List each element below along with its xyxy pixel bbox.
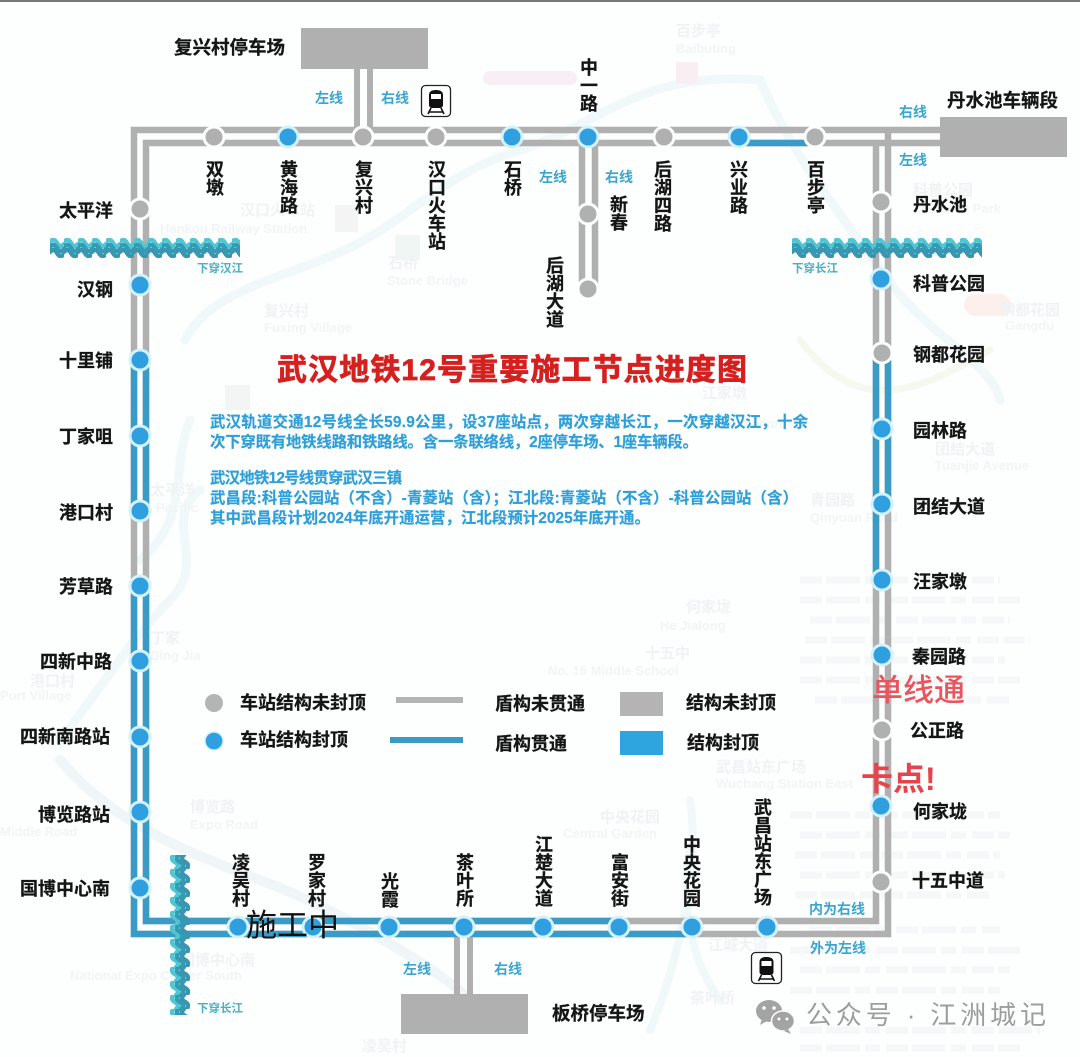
station: 新春: 新春 xyxy=(608,194,628,231)
track labels: left and right lines: 左线 xyxy=(315,90,343,106)
faded background city metro map: Middle Road xyxy=(0,824,77,839)
faded background city metro map: 国博中心南 xyxy=(180,951,255,969)
faded background city metro map: He Jialong xyxy=(660,618,726,633)
station: 科普公园 xyxy=(871,269,985,294)
faded background city metro map: Pacific xyxy=(156,500,198,515)
station: 四新南路站 xyxy=(20,726,150,747)
text block: line overview: 武汉轨道交通12号线全长59.9公里，设37座站点，两次穿越长江，一次穿越汉江，十余 xyxy=(210,412,809,431)
faded background notes xyxy=(790,580,1040,1048)
title: 武汉地铁12号重要施工节点进度图 xyxy=(277,354,747,387)
text block: line overview xyxy=(210,412,809,451)
station: 百步亭 xyxy=(805,127,825,214)
track labels: left and right lines: 右线 xyxy=(494,961,522,977)
station: 钢都花园: 钢都花园 xyxy=(913,345,985,365)
track labels: left and right lines: 左线 xyxy=(403,961,431,977)
bottom row stations xyxy=(228,798,777,937)
station: 汉钢 xyxy=(77,275,150,300)
station: 兴业路 xyxy=(728,127,749,214)
station: 四新南路站: 四新南路站 xyxy=(20,726,110,747)
station: 秦园路 xyxy=(872,645,966,667)
track labels: left and right lines: 内为右线 xyxy=(809,901,865,917)
station: 博览路站 xyxy=(38,802,150,825)
station: 双墩: 双墩 xyxy=(204,160,224,196)
faded background city metro map: Science Park xyxy=(920,201,1002,216)
station: 公正路 xyxy=(872,720,964,741)
depot: 丹水池车辆段 xyxy=(940,90,1067,157)
station: 江楚大道: 江楚大道 xyxy=(533,835,553,908)
top row stations xyxy=(204,58,825,329)
station: 后湖四路: 后湖四路 xyxy=(652,160,672,232)
faded background city metro map: 中央花园 xyxy=(600,808,660,826)
station: 茶叶所 xyxy=(454,853,474,937)
track labels: left and right lines: 左线 xyxy=(899,152,927,168)
station: 芳草路 xyxy=(59,576,150,597)
station: 凌吴村: 凌吴村 xyxy=(230,853,250,907)
station: 博览路站: 博览路站 xyxy=(38,805,110,825)
station: 中央花园: 中央花园 xyxy=(681,835,701,907)
station: 百步亭: 百步亭 xyxy=(805,160,825,214)
faded background city metro map: 江城大道 xyxy=(708,936,768,954)
callout: 施工中: 施工中 xyxy=(246,908,339,943)
watermark text: 公众号 · 江洲城记 xyxy=(806,1000,1046,1030)
faded background city metro map: Wuchang Station East xyxy=(716,776,854,791)
track labels: left and right lines xyxy=(315,90,927,977)
faded background city metro map: 江家墩 xyxy=(702,384,747,402)
station: 后湖大道 xyxy=(544,256,598,329)
station: 国博中心南 xyxy=(20,878,150,899)
station: 富安街 xyxy=(609,852,629,937)
station: 罗家村 xyxy=(303,853,326,937)
track labels: left and right lines: 左线 xyxy=(539,169,567,185)
faded background city metro map: 科普公园 xyxy=(913,181,973,199)
station: 凌吴村 xyxy=(228,853,250,937)
station: 丁家咀: 丁家咀 xyxy=(59,426,113,447)
river crossing: 下穿汉江: 下穿汉江 xyxy=(197,261,243,275)
station: 罗家村: 罗家村 xyxy=(306,853,326,907)
station: 黄海路: 黄海路 xyxy=(278,159,298,214)
depot: 板桥停车场: 板桥停车场 xyxy=(552,1003,645,1024)
legend: station roof sealed: 车站结构封顶 xyxy=(240,729,348,750)
faded background city metro map: 复兴村 xyxy=(264,302,309,320)
track labels: left and right lines: 右线 xyxy=(381,90,409,106)
top edge strip xyxy=(0,0,1080,2)
station: 中央花园 xyxy=(681,835,702,937)
station: 复兴村: 复兴村 xyxy=(353,160,373,214)
legend: tunnel not connected: 盾构未贯通 xyxy=(495,694,585,714)
depot: 复兴村停车场: 复兴村停车场 xyxy=(174,37,285,58)
track labels: left and right lines: 右线 xyxy=(605,169,633,185)
text block: opening schedule xyxy=(210,468,798,527)
depot: 丹水池车辆段: 丹水池车辆段 xyxy=(947,90,1058,111)
station: 钢都花园 xyxy=(872,343,985,365)
station: 太平洋: 太平洋 xyxy=(59,201,113,221)
station: 中一路: 中一路 xyxy=(578,58,598,112)
line 12 loop tracks xyxy=(134,130,940,934)
station: 复兴村 xyxy=(353,127,373,214)
faded background city metro map: Gangdu xyxy=(1005,318,1054,333)
faded background city metro map: Baibuting xyxy=(676,41,736,56)
station: 武昌站东广场: 武昌站东广场 xyxy=(752,798,772,906)
faded background city metro map: 百步亭 xyxy=(676,22,721,40)
legend: structure not sealed xyxy=(620,692,776,716)
faded background city metro map: 十五中 xyxy=(645,645,690,662)
faded background city metro map: No. 15 Middle School xyxy=(548,663,679,678)
station: 园林路 xyxy=(872,419,967,441)
station: 丹水池 xyxy=(871,192,967,215)
right column stations xyxy=(871,192,985,892)
station: 十五中道: 十五中道 xyxy=(912,870,984,891)
station: 汉口火车站: 汉口火车站 xyxy=(426,160,446,250)
river crossing: 下穿长江 (south) xyxy=(170,855,243,1015)
icon: train at 汉口火车站 xyxy=(422,86,450,116)
station: 石桥 xyxy=(502,127,522,196)
faded background city metro map: 博览路 xyxy=(190,798,235,816)
station: 富安街: 富安街 xyxy=(609,852,629,907)
station: 科普公园: 科普公园 xyxy=(913,274,985,294)
faded background city metro map: 丁家 xyxy=(150,629,180,647)
station: 团结大道 xyxy=(872,494,985,517)
station: 十里铺: 十里铺 xyxy=(59,351,113,371)
faded background city metro map: 港口村 xyxy=(30,672,75,690)
station: 丁家咀 xyxy=(59,426,150,447)
faded background city metro map: Wang Jiadun xyxy=(702,416,782,431)
station: 光霞: 光霞 xyxy=(379,872,399,908)
station: 武昌站东广场 xyxy=(752,798,777,937)
text block: opening schedule: 武汉地铁12号线贯穿武汉三镇 xyxy=(210,468,402,487)
station: 中一路 xyxy=(578,58,598,147)
station: 公正路: 公正路 xyxy=(910,721,964,741)
station: 后湖大道: 后湖大道 xyxy=(544,256,564,329)
station: 港口村: 港口村 xyxy=(59,503,113,523)
faded background city metro map: Port Village xyxy=(0,688,71,703)
faded background city metro map: 武昌站东广场 xyxy=(716,758,806,776)
station: 四新中路: 四新中路 xyxy=(40,651,112,672)
faded background city metro map: 石桥 xyxy=(388,254,418,272)
faded background city metro map: 钢都花园 xyxy=(1000,301,1060,319)
station: 汪家墩: 汪家墩 xyxy=(913,571,967,592)
faded background city metro map: Expo Road xyxy=(190,817,258,832)
station: 后湖四路 xyxy=(652,127,674,232)
station: 何家垅 xyxy=(871,796,967,822)
text block: line overview: 次下穿既有地铁线路和铁路线。含一条联络线，2座停车场、1座车辆段。 xyxy=(210,432,698,451)
station: 芳草路: 芳草路 xyxy=(59,577,113,597)
legend: structure sealed: 结构封顶 xyxy=(687,733,759,753)
station: 光霞 xyxy=(379,872,399,937)
station: 新春 xyxy=(578,194,628,231)
icon: wechat xyxy=(756,1000,794,1034)
faded background city metro map: Fuxing Village xyxy=(264,320,352,335)
depot: 板桥停车场 xyxy=(401,934,645,1034)
station: 秦园路: 秦园路 xyxy=(912,647,966,667)
station: 双墩 xyxy=(204,127,224,196)
faded background city metro map: National Expo Center South xyxy=(70,968,242,983)
faded background city metro map: 太平洋 xyxy=(150,481,195,499)
left column stations xyxy=(20,199,150,899)
station: 太平洋 xyxy=(59,199,150,221)
station: 四新中路 xyxy=(40,651,150,672)
station: 丹水池: 丹水池 xyxy=(913,195,967,215)
station: 十里铺 xyxy=(59,350,150,371)
text block: opening schedule: 武昌段:科普公园站（不含）-青菱站（含）；江北段:青菱站（不含）-科普公园站（含） xyxy=(210,488,798,507)
station: 园林路: 园林路 xyxy=(913,421,967,441)
track labels: left and right lines: 右线 xyxy=(899,104,927,120)
station: 何家垅: 何家垅 xyxy=(913,801,967,822)
station: 石桥: 石桥 xyxy=(502,160,522,196)
faded background city metro map: Ding Jia xyxy=(150,648,201,663)
legend: station roof not sealed: 车站结构未封顶 xyxy=(240,692,366,713)
faded background city metro map: 茶叶桥 xyxy=(690,989,735,1007)
faded background city metro map: Central Garden xyxy=(563,826,657,841)
station: 汪家墩 xyxy=(872,570,967,592)
track labels: left and right lines: 外为左线 xyxy=(810,940,866,956)
faded background city metro map: 凌吴村 xyxy=(362,1037,407,1055)
faded background city metro map: Hankou Railway Station xyxy=(160,221,307,236)
faded background city metro map: 团结大道 xyxy=(935,440,995,458)
legend: tunnel connected: 盾构贯通 xyxy=(495,734,567,754)
station: 茶叶所: 茶叶所 xyxy=(454,853,474,908)
station: 黄海路 xyxy=(278,127,298,214)
legend: structure not sealed: 结构未封顶 xyxy=(686,693,776,713)
faded background city metro map: 汉口火车站 xyxy=(240,201,315,219)
faded background city metro map: Qinyuan Road xyxy=(810,510,898,525)
river crossing: 下穿长江 (south): 下穿长江 xyxy=(197,1001,243,1015)
station: 十五中道 xyxy=(871,870,984,892)
faded background city metro map: 何家垅 xyxy=(686,598,731,616)
station: 港口村 xyxy=(59,501,150,523)
legend: structure sealed xyxy=(620,731,759,755)
station: 汉钢: 汉钢 xyxy=(77,280,113,300)
station: 兴业路: 兴业路 xyxy=(728,160,748,214)
text block: opening schedule: 其中武昌段计划2024年底开通运营，江北段预计2025年底开通。 xyxy=(210,508,650,527)
river crossing: 下穿长江 (north): 下穿长江 xyxy=(792,261,838,275)
faded background city metro map: Stone Bridge xyxy=(387,273,468,288)
faded background city metro map: 青园路 xyxy=(810,491,855,509)
river crossing: 下穿汉江 xyxy=(50,238,243,275)
depot: 复兴村停车场 xyxy=(174,28,428,130)
legend xyxy=(205,692,776,755)
faded background city metro map: Tuanjie Avenue xyxy=(935,458,1029,473)
icon: train at 武昌站东广场 xyxy=(752,952,782,984)
station: 团结大道: 团结大道 xyxy=(913,496,985,517)
callout: 卡点!: 卡点! xyxy=(861,761,936,797)
station: 国博中心南: 国博中心南 xyxy=(20,879,110,899)
river crossing: 下穿长江 (north) xyxy=(792,238,982,275)
callout: 单线通: 单线通 xyxy=(872,673,965,708)
